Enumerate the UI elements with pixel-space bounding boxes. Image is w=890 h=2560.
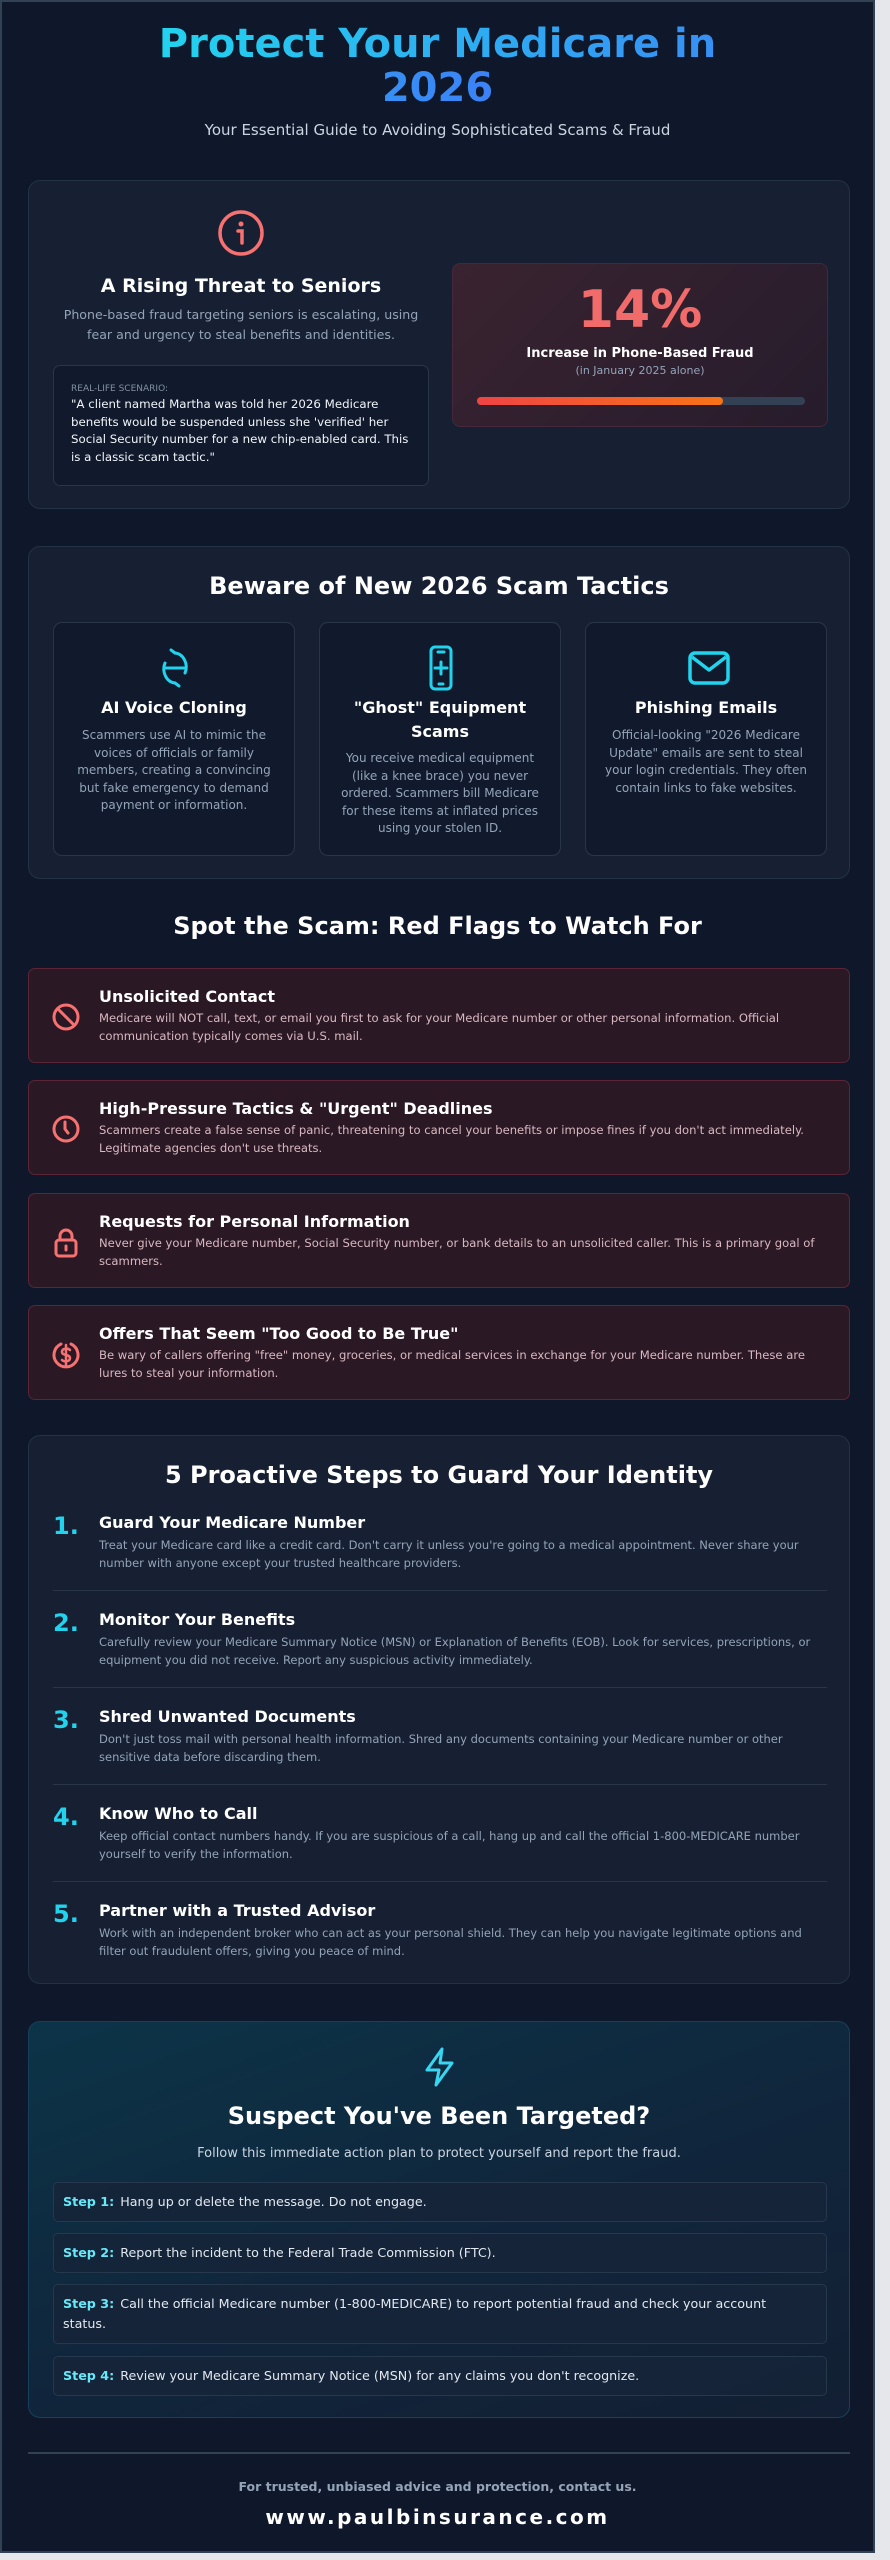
heading: red flags: Spot the Scam: Red Flags to Watch For xyxy=(173,912,702,940)
step 5: Work with an independent broker who can act as your personal shield. They can help you navigate legitimate options and filter out fraudulent offers, giving you peace of mind. xyxy=(99,1926,802,1958)
flag: high pressure xyxy=(28,1080,850,1175)
card: phishing emails: Phishing Emails xyxy=(635,698,777,717)
card: AI voice cloning xyxy=(53,622,295,856)
step box 3: Step 3: Call the official Medicare number (1-800-MEDICARE) to report potential fraud and check your account status. xyxy=(63,2296,766,2331)
callout: real-life scenario: "A client named Martha was told her 2026 Medicare benefits would be suspended unless she 'verified' her Social Security number for a new chip-enabled card. This is a classic scam tactic." xyxy=(71,397,408,464)
flag: high pressure: High-Pressure Tactics & "Urgent" Deadlines xyxy=(99,1099,493,1118)
icon: money xyxy=(52,1342,80,1368)
stat: 14%: (in January 2025 alone) xyxy=(575,364,705,377)
step 2: Monitor Your Benefits xyxy=(99,1610,295,1629)
card: AI voice cloning: AI Voice Cloning xyxy=(101,698,247,717)
bar chart: progress xyxy=(477,397,805,405)
step 5: 5. xyxy=(53,1900,79,1928)
icon: ban xyxy=(52,1004,80,1030)
title: Protect Your Medicare in xyxy=(159,21,716,67)
icon: info xyxy=(218,210,264,256)
subtitle: Your Essential Guide to Avoiding Sophisticated Scams & Fraud xyxy=(205,121,670,139)
footer url: www.paulbinsurance.com xyxy=(265,2505,610,2529)
card: ghost equipment: You receive medical equipment (like a knee brace) you never ordered. Scammers bill Medicare for these items at inflated prices using your stolen ID. xyxy=(341,751,539,835)
text: action plan intro: Follow this immediate action plan to protect yourself and report the fraud. xyxy=(197,2146,681,2161)
step 1: Guard Your Medicare Number xyxy=(99,1513,365,1532)
step 1: Treat your Medicare card like a credit card. Don't carry it unless you're going to a medical appointment. Never share your number with anyone except your trusted healthcare providers. xyxy=(99,1538,799,1570)
flag: unsolicited contact xyxy=(28,968,850,1063)
step 1 xyxy=(53,1512,799,1570)
flag: too good to be true xyxy=(28,1305,850,1400)
step 2: 2. xyxy=(53,1609,79,1637)
icon: lock xyxy=(54,1228,78,1258)
step 4: Keep official contact numbers handy. If you are suspicious of a call, hang up and call the official 1-800-MEDICARE number yourself to verify the information. xyxy=(99,1829,800,1860)
card: ghost equipment xyxy=(319,622,561,856)
step 4 xyxy=(53,1803,800,1860)
icon: envelope xyxy=(688,651,730,685)
callout: real-life scenario: REAL-LIFE SCENARIO: xyxy=(71,384,168,394)
card: AI voice cloning: Scammers use AI to mimic the voices of officials or family members, creating a convincing but fake emergency to demand payment or information. xyxy=(77,728,271,812)
step box 4 xyxy=(53,2356,827,2396)
step box 3 xyxy=(53,2284,827,2344)
step 4: Know Who to Call xyxy=(99,1804,257,1823)
flag: personal information: Never give your Medicare number, Social Security number, or bank details to an unsolicited caller. This is a primary goal of scammers. xyxy=(99,1236,814,1268)
step 3 xyxy=(53,1706,783,1764)
step 1: 1. xyxy=(53,1512,79,1540)
flag: too good to be true: Offers That Seem "Too Good to Be True" xyxy=(99,1324,458,1343)
footer text: For trusted, unbiased advice and protection, contact us. xyxy=(238,2479,637,2494)
step box 1 xyxy=(53,2182,827,2222)
flag: too good to be true: Be wary of callers offering "free" money, groceries, or medical services in exchange for your Medicare number. These are lures to steal your information. xyxy=(99,1348,805,1380)
icon: clock xyxy=(52,1116,80,1142)
step 5: Partner with a Trusted Advisor xyxy=(99,1901,375,1920)
step 2 xyxy=(53,1609,810,1666)
step 2: Carefully review your Medicare Summary Notice (MSN) or Explanation of Benefits (EOB). Look for services, prescriptions, or equipment you did not receive. Report any suspicious activity immediately. xyxy=(99,1635,810,1666)
title xyxy=(159,21,716,111)
step 4: 4. xyxy=(53,1803,79,1831)
panel: suspect targeted xyxy=(28,2021,850,2418)
stat: 14% xyxy=(452,263,828,427)
step box 2 xyxy=(53,2233,827,2273)
step 3: 3. xyxy=(53,1706,79,1734)
flag: personal information xyxy=(28,1193,850,1288)
title: 2026 xyxy=(382,65,493,111)
step 5 xyxy=(53,1900,802,1958)
stat: 14%: 14% xyxy=(578,280,702,340)
icon: lightning xyxy=(425,2048,454,2086)
icon: phone plus xyxy=(430,646,452,690)
heading: scam tactics: Beware of New 2026 Scam Tactics xyxy=(209,572,669,600)
step 3: Shred Unwanted Documents xyxy=(99,1707,356,1726)
step box 1: Step 1: Hang up or delete the message. Do not engage. xyxy=(63,2194,427,2209)
step box 4: Step 4: Review your Medicare Summary Notice (MSN) for any claims you don't recognize. xyxy=(63,2368,639,2383)
panel: rising threat xyxy=(28,180,850,509)
heading: suspect: Suspect You've Been Targeted? xyxy=(228,2102,650,2130)
card: phishing emails: Official-looking "2026 Medicare Update" emails are sent to steal your login credentials. They often contain links to fake websites. xyxy=(605,728,807,794)
panel: 5 proactive steps xyxy=(28,1435,850,1984)
card: ghost equipment: "Ghost" Equipment Scams xyxy=(354,698,526,741)
icon: voice xyxy=(162,648,188,688)
stat: 14%: Increase in Phone-Based Fraud xyxy=(526,346,754,361)
step 3: Don't just toss mail with personal health information. Shred any documents containing your Medicare number or other sensitive data before discarding them. xyxy=(99,1732,783,1764)
heading: proactive steps: 5 Proactive Steps to Guard Your Identity xyxy=(165,1461,713,1489)
flag: high pressure: Scammers create a false sense of panic, threatening to cancel your benefits or impose fines if you don't act immediately. Legitimate agencies don't use threats. xyxy=(99,1123,804,1154)
callout: real-life scenario xyxy=(53,365,429,486)
flag: personal information: Requests for Personal Information xyxy=(99,1212,410,1231)
flag: unsolicited contact: Unsolicited Contact xyxy=(99,987,275,1006)
flag: unsolicited contact: Medicare will NOT call, text, or email you first to ask for your Medicare number or other personal information. Official communication typically comes via U.S. mail. xyxy=(99,1011,779,1042)
text: threat description: Phone-based fraud targeting seniors is escalating, using fear and urgency to steal benefits and identities. xyxy=(64,307,418,342)
card: phishing emails xyxy=(585,622,827,856)
heading: rising threat: A Rising Threat to Seniors xyxy=(101,275,381,297)
step box 2: Step 2: Report the incident to the Federal Trade Commission (FTC). xyxy=(63,2245,496,2260)
panel: 2026 scam tactics xyxy=(28,546,850,879)
